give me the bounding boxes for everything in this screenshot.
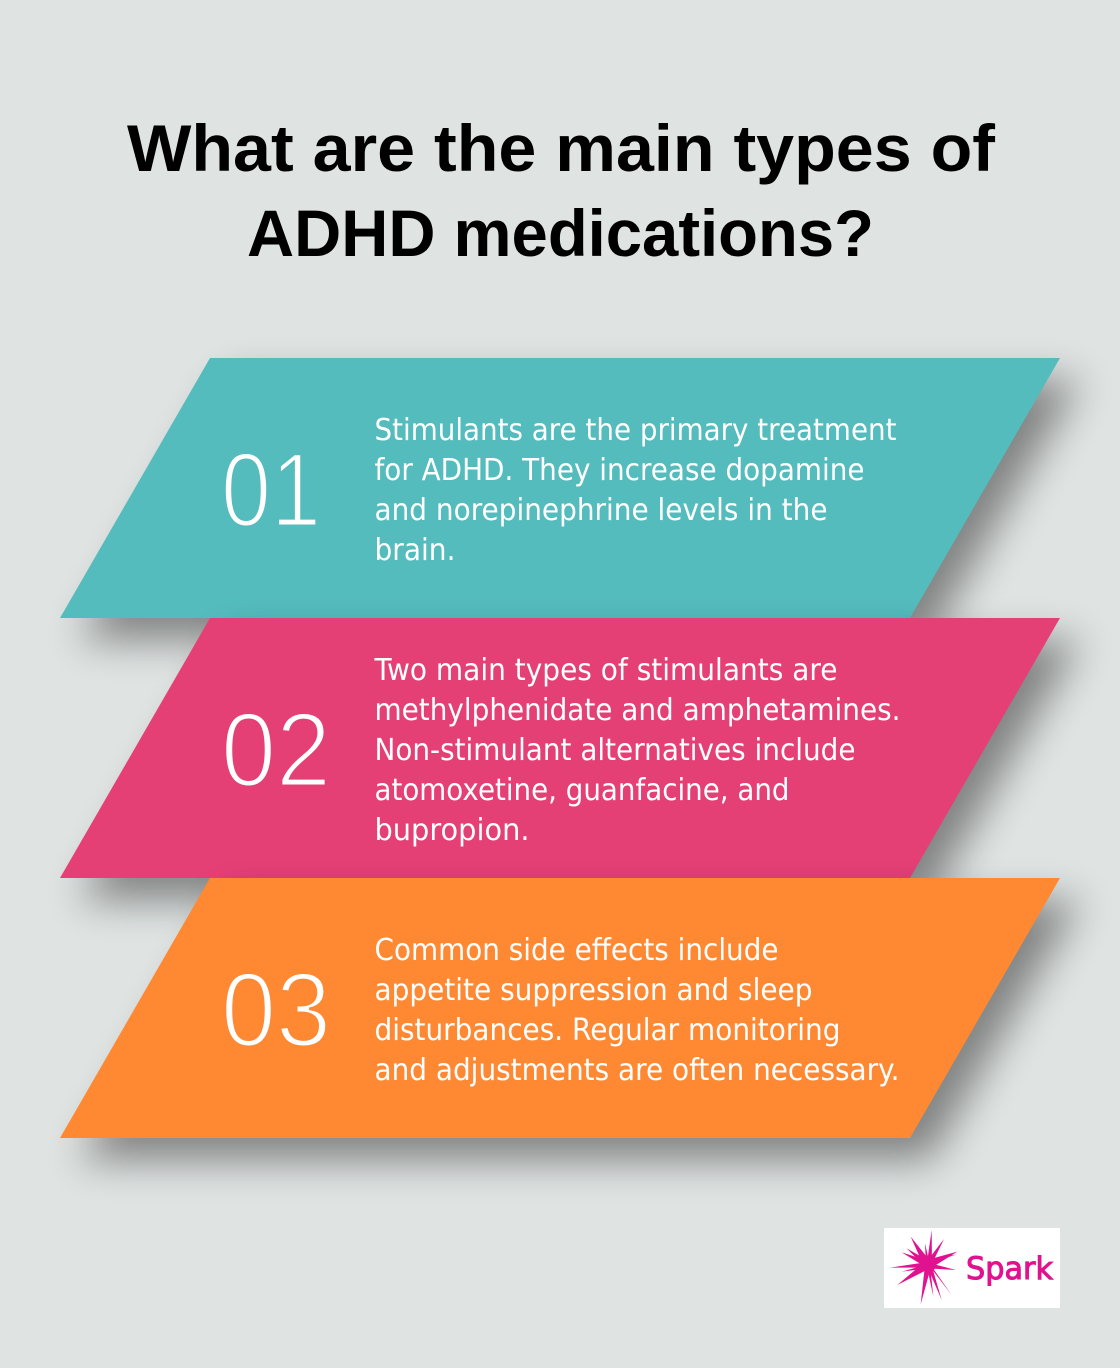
text: types of stimulants description: atomoxetine, guanfacine, and [374,773,790,808]
title [127,111,996,270]
panel: step 02 types [60,618,1060,878]
text: stimulants description [374,413,897,568]
panel: step 03 side effects [60,878,1060,1138]
text: side effects description: appetite suppression and sleep [374,973,812,1008]
text: side effects description [374,933,900,1088]
wordmark: Spark [966,1251,1053,1287]
text: side effects description: and adjustments are often necessary. [374,1053,900,1088]
text: types of stimulants description: bupropion. [374,813,530,848]
pink parallelogram [60,618,1060,878]
teal parallelogram [60,358,1060,618]
number 01: 01 [221,432,321,549]
text: types of stimulants description [374,653,900,848]
icon: spark starburst [890,1230,957,1304]
title: What are the main types of [127,111,996,185]
text: side effects description: disturbances. Regular monitoring [374,1013,840,1048]
text: types of stimulants description: Two main types of stimulants are [374,653,838,688]
text: stimulants description: and norepinephrine levels in the [374,493,828,528]
title: ADHD medications? [247,196,874,270]
text: stimulants description: Stimulants are the primary treatment [374,413,897,448]
text: side effects description: Common side effects include [374,933,778,968]
orange parallelogram [60,878,1060,1138]
logo: Spark [884,1228,1060,1308]
panel: step 01 stimulants [60,358,1060,618]
text: stimulants description: brain. [374,533,456,568]
number 03: 03 [221,952,331,1069]
text: types of stimulants description: methylphenidate and amphetamines. [374,693,900,728]
text: stimulants description: for ADHD. They increase dopamine [374,453,864,488]
text: types of stimulants description: Non-stimulant alternatives include [374,733,856,768]
number 02: 02 [221,692,331,809]
